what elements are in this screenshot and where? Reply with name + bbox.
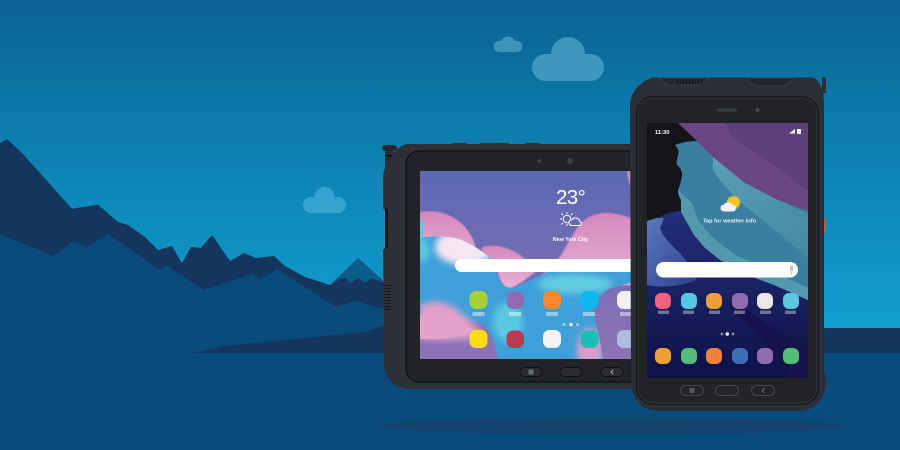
microphone glyph	[790, 266, 792, 275]
app icons: row 2	[655, 348, 799, 364]
wallpaper: pink lower left core	[420, 314, 461, 340]
ground	[0, 353, 900, 450]
phone bezel	[638, 98, 817, 403]
weather icon: sun and cloud	[720, 196, 740, 212]
app icons: row 2	[470, 330, 635, 348]
phone top notch right	[747, 78, 793, 86]
phone bezel outline	[636, 96, 819, 405]
tablet front cameras	[537, 158, 573, 164]
phone screen	[647, 123, 808, 378]
tablet button glyphs	[528, 370, 614, 374]
cloud: large top	[532, 37, 604, 81]
phone earpiece	[717, 108, 737, 112]
tablet: landscape device	[382, 143, 656, 389]
city label: New York City	[553, 237, 588, 243]
wallpaper: lower dark wedge	[727, 302, 794, 344]
tablet screen	[420, 171, 631, 359]
app icons: row 1	[470, 291, 635, 309]
cloud: small top	[494, 37, 522, 52]
weather prompt: Tap for weather info	[703, 218, 757, 224]
wallpaper: pink lower left	[420, 302, 484, 340]
weather icon: sun and cloud	[560, 212, 581, 226]
wallpaper: black silhouette	[647, 123, 697, 221]
phone top speaker grille	[677, 80, 702, 84]
wallpaper: light teal upper band	[713, 157, 808, 258]
mountain: distant peak	[330, 258, 386, 300]
wallpaper: dark purple	[725, 123, 808, 192]
wallpaper: blue flow	[420, 236, 631, 359]
sky background	[0, 0, 900, 353]
wallpaper: pink shapes	[420, 171, 635, 288]
search bar	[455, 259, 645, 272]
phone body	[630, 78, 826, 411]
phone navigation buttons	[680, 386, 774, 396]
search bar	[656, 262, 798, 278]
wallpaper: cyan top left	[420, 218, 425, 240]
cloud: left	[303, 187, 346, 213]
tablet top buttons	[452, 143, 540, 146]
phone front camera	[756, 108, 760, 112]
app labels	[658, 310, 796, 314]
temperature: 23°	[556, 186, 585, 209]
shoreline island	[193, 325, 900, 353]
mountains: front range	[0, 234, 400, 353]
wallpaper: teal wave	[665, 141, 808, 300]
status time: 11:30	[655, 130, 670, 136]
stylus	[382, 145, 397, 173]
tablet body	[383, 144, 650, 389]
wallpaper: purple	[678, 123, 808, 211]
phone side stylus cap	[822, 77, 826, 93]
status icons	[789, 129, 801, 134]
tablet side grip	[384, 208, 391, 310]
phone side button	[823, 218, 826, 233]
wallpaper: light blue lower left	[647, 218, 697, 287]
device shadow	[379, 418, 845, 434]
phone: portrait device	[630, 77, 826, 411]
tablet bezel	[406, 151, 656, 382]
tablet navigation buttons	[520, 368, 623, 376]
mountains: back range	[0, 139, 390, 330]
app icons: row 1	[655, 293, 799, 309]
phone button glyphs	[690, 388, 764, 393]
wallpaper: light teal lower band	[678, 190, 808, 300]
app labels	[472, 312, 632, 316]
page dots	[562, 323, 579, 326]
phone top notch left	[660, 78, 708, 85]
page dots	[720, 332, 734, 336]
